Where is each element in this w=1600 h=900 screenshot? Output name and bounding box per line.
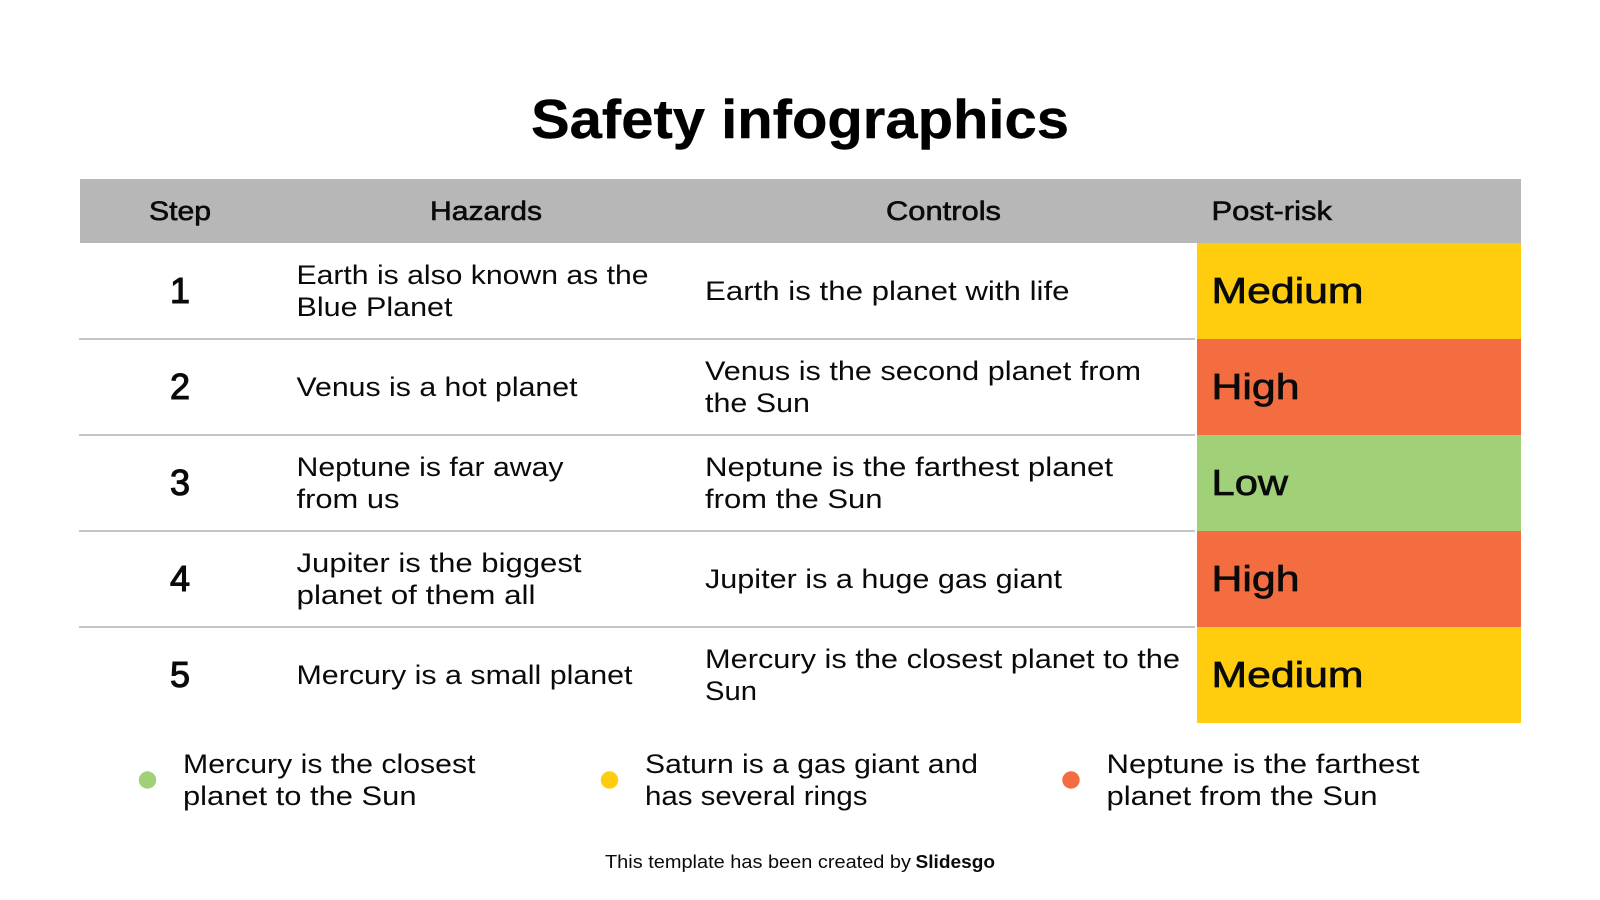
green legend text: planet to the Sun bbox=[183, 781, 416, 811]
legend item: orange bbox=[1062, 749, 1420, 811]
control text 5: Sun bbox=[705, 676, 757, 706]
orange legend text: Neptune is the farthest bbox=[1106, 749, 1420, 779]
risk cell: low bbox=[1197, 435, 1521, 531]
risk label 3: Low bbox=[1212, 462, 1289, 503]
row 2 bbox=[170, 339, 1521, 435]
step number 2: 2 bbox=[170, 366, 190, 407]
heading: step: Step bbox=[149, 196, 211, 226]
control text 2: the Sun bbox=[705, 388, 810, 418]
step number 5: 5 bbox=[170, 654, 190, 695]
hazard text 4: planet of them all bbox=[296, 580, 536, 610]
legend bbox=[139, 749, 1420, 811]
risk cell: high bbox=[1197, 339, 1521, 435]
hazard text 2: Venus is a hot planet bbox=[296, 372, 578, 402]
step number 4: 4 bbox=[170, 558, 190, 599]
green legend text: Mercury is the closest bbox=[183, 749, 476, 779]
control text 4: Jupiter is a huge gas giant bbox=[705, 564, 1063, 594]
hazard text 3: from us bbox=[296, 484, 400, 514]
risk label 2: High bbox=[1212, 366, 1300, 407]
control text 5: Mercury is the closest planet to the bbox=[705, 644, 1180, 674]
step number 3: 3 bbox=[170, 462, 190, 503]
hazard text 4: Jupiter is the biggest bbox=[296, 548, 582, 578]
green dot bbox=[139, 771, 156, 789]
yellow legend text: has several rings bbox=[645, 781, 868, 811]
title: Safety infographics bbox=[531, 88, 1069, 150]
risk label 5: Medium bbox=[1212, 654, 1364, 695]
orange legend text: planet from the Sun bbox=[1106, 781, 1378, 811]
yellow legend text: Saturn is a gas giant and bbox=[645, 749, 978, 779]
table bbox=[79, 179, 1521, 723]
hazard text 1: Blue Planet bbox=[296, 292, 453, 322]
hazard text 1: Earth is also known as the bbox=[296, 260, 648, 290]
table header row bbox=[80, 179, 1521, 243]
row 3 bbox=[170, 435, 1521, 531]
header bar bbox=[80, 179, 1521, 243]
control text 1: Earth is the planet with life bbox=[705, 276, 1070, 306]
orange dot bbox=[1062, 771, 1080, 789]
control text 3: Neptune is the farthest planet bbox=[705, 452, 1114, 482]
footer credit: Slidesgo bbox=[916, 852, 995, 872]
heading: controls: Controls bbox=[886, 196, 1001, 226]
heading: hazards: Hazards bbox=[430, 196, 542, 226]
hazard text 5: Mercury is a small planet bbox=[296, 660, 633, 690]
heading: post-risk: Post-risk bbox=[1212, 196, 1333, 226]
row 5 bbox=[170, 627, 1521, 723]
footer credit: This template has been created by bbox=[605, 852, 911, 872]
yellow dot bbox=[601, 771, 618, 789]
risk cell: medium bbox=[1197, 627, 1521, 723]
step number 1: 1 bbox=[170, 270, 190, 311]
legend item: green bbox=[139, 749, 476, 811]
legend item: yellow bbox=[601, 749, 978, 811]
hazard text 3: Neptune is far away bbox=[296, 452, 564, 482]
risk label 4: High bbox=[1212, 558, 1300, 599]
risk cell: medium bbox=[1197, 243, 1521, 339]
row 4 bbox=[170, 531, 1521, 627]
control text 2: Venus is the second planet from bbox=[705, 356, 1141, 386]
risk label 1: Medium bbox=[1212, 270, 1364, 311]
row 1 bbox=[170, 243, 1521, 339]
control text 3: from the Sun bbox=[705, 484, 882, 514]
risk cell: high bbox=[1197, 531, 1521, 627]
